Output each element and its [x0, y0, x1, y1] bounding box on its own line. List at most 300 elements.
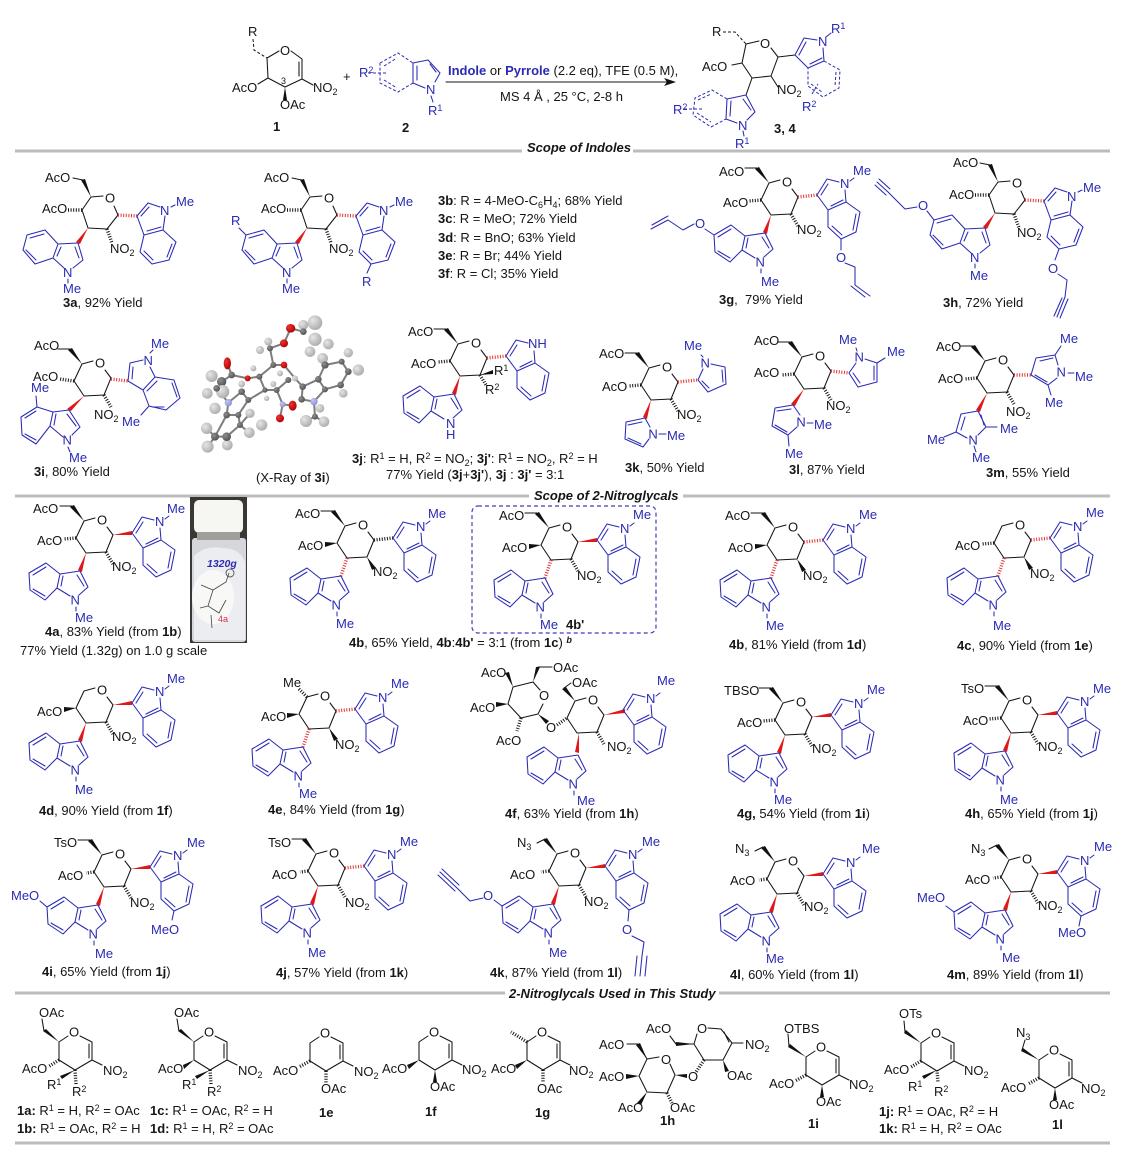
caption 4a: 4a, 83% Yield (from 1b) — [45, 624, 182, 639]
compound 3a: 2 — [130, 248, 135, 258]
compound 4l: Me — [766, 951, 784, 966]
compound 4c: N — [1073, 519, 1082, 534]
compound 1 general 2-nitroglycal: NO — [313, 80, 332, 95]
compound 1g: NO — [569, 1063, 588, 1078]
compound 1g: O — [537, 1024, 547, 1040]
compound 3a: AcO — [45, 170, 70, 185]
compound 3h: N — [970, 250, 979, 265]
compound 4i: Me — [95, 946, 113, 961]
galactose sugar substituent: AcO — [496, 733, 521, 748]
compound 1g: OAc — [537, 1081, 563, 1096]
compound 3m: NO — [1006, 404, 1026, 419]
compound 1 general 2-nitroglycal — [232, 24, 338, 134]
compound 4b': N — [620, 521, 629, 536]
compound 1 general 2-nitroglycal: 2 — [332, 87, 338, 97]
compound 4b': AcO — [502, 540, 527, 555]
product 3, 4 general structure: R — [802, 99, 811, 114]
compound 1a / 1b: NO — [103, 1063, 122, 1078]
compound 2 indole reagent — [359, 53, 442, 135]
compound 3m: Me — [1000, 421, 1018, 436]
reaction scheme — [232, 21, 845, 151]
caption 3m: 3m, 55% Yield — [986, 465, 1070, 480]
compound 3b-3f general: Me — [395, 194, 413, 209]
galactose sugar substituent: AcO — [470, 700, 495, 715]
compound 1 general 2-nitroglycal: AcO — [232, 80, 257, 95]
compound 4i: MeO — [151, 922, 179, 937]
compound 4k: 2 — [604, 901, 609, 911]
legend 1a 1b: 2 — [111, 1121, 116, 1131]
legend 1c 1d: 1 — [182, 1103, 187, 1113]
compound 3m: O — [998, 352, 1008, 368]
caption 3j: ; — [470, 451, 477, 466]
compound 2 indole reagent: R — [428, 103, 437, 118]
compound 4k: Me — [549, 945, 567, 960]
compound 3k: AcO — [602, 379, 627, 394]
caption 3j: = NO — [512, 451, 547, 466]
compound 3k: N — [700, 356, 710, 370]
legend 1j 1k: = OAc — [962, 1121, 1002, 1136]
label 1l: 1l — [1052, 1117, 1063, 1132]
compound 4h: TsO — [961, 681, 984, 696]
compound 4k: O — [622, 922, 632, 937]
compound 3g: N — [840, 176, 849, 191]
compound 4g: O — [796, 694, 806, 710]
compound 3m: Me — [1045, 395, 1063, 410]
compound 3g: O — [782, 174, 792, 190]
compound 4g: NO — [812, 741, 832, 756]
compound 4e — [252, 675, 409, 801]
compound 4a: 2 — [132, 566, 137, 576]
legend 1c 1d: = OAc — [233, 1121, 274, 1136]
compound 3l: Me — [887, 344, 905, 359]
compound 3b-3f general: N — [379, 203, 388, 218]
compound 1j / 1k: AcO — [884, 1062, 909, 1077]
compound 4m — [917, 839, 1112, 965]
compound 3m: Me — [972, 450, 990, 465]
substituent list 3b-3f: ; 68% Yield — [557, 193, 623, 208]
compound 3j / 3j' — [403, 324, 549, 442]
compound 3g: O — [695, 216, 705, 231]
compound 4i: NO — [130, 895, 150, 910]
legend 1j 1k: 1k: R — [879, 1121, 911, 1136]
compound 4e: NO — [335, 737, 354, 752]
label 1e: 1e — [319, 1105, 333, 1120]
compound 4l: NO — [804, 899, 824, 914]
caption 3g: 3g, 79% Yield — [719, 292, 803, 307]
product 3, 4 general structure: 1 — [840, 21, 845, 31]
compound 3l: AcO — [754, 333, 779, 348]
compound 3b-3f general: R — [231, 213, 240, 228]
compound 3b-3f general: R — [362, 274, 371, 289]
compound 4j: O — [329, 846, 339, 860]
label 1i: 1i — [808, 1116, 819, 1131]
compound 4b (from 1c): Me — [428, 506, 446, 521]
section heading: Scope of Indoles: Scope of Indoles — [527, 140, 631, 155]
compound 4e: 2 — [354, 744, 360, 754]
compound 1l: 3 — [1025, 1032, 1030, 1042]
caption 4j: 4j, 57% Yield (from 1k) — [276, 965, 408, 980]
compound 4b (from 1c): Me — [336, 616, 354, 631]
compound 4e: Me — [299, 786, 317, 801]
compound 3k: NO — [677, 407, 696, 422]
compound 4b': 2 — [596, 575, 602, 585]
caption 3j: 3j: R — [352, 451, 379, 466]
section heading: 2-Nitroglycals Used in This Study: 2-Nitroglycals Used in This Study — [508, 986, 716, 1001]
compound 4b': AcO — [499, 508, 524, 523]
galactose sugar substituent: AcO — [481, 665, 506, 680]
compound 4g: TBSO — [724, 683, 759, 698]
compound 1f: NO — [462, 1062, 482, 1077]
compound 4l: AcO — [730, 873, 755, 888]
compound 4l: 2 — [824, 906, 829, 916]
compound 4a: N — [70, 592, 80, 608]
product 3, 4 general structure: NO — [777, 82, 796, 97]
compound 4b': Me — [540, 617, 558, 632]
product 3, 4 general structure: N — [738, 118, 747, 133]
compound 3b-3f general: O — [324, 190, 334, 206]
caption 3h: 3h, 72% Yield — [943, 295, 1023, 310]
compound 1e: OAc — [321, 1081, 347, 1096]
compound 4c — [947, 505, 1104, 633]
compound 1f: O — [429, 1024, 439, 1040]
compound 4b (from 1d): AcO — [725, 508, 750, 523]
compound 4b (from 1d): N — [762, 600, 771, 614]
compound 4f: NO — [607, 739, 626, 754]
compound 4j: N — [302, 926, 312, 940]
compound 1l: OAc — [1049, 1097, 1075, 1112]
legend 1c 1d: 1d: R — [150, 1121, 182, 1136]
compound 4f — [470, 660, 675, 808]
compound 3j / 3j': H — [446, 427, 455, 442]
compound 2 indole reagent: 1 — [437, 103, 442, 113]
compound 3b-3f general: Me — [282, 281, 300, 296]
compound 4e: O — [320, 688, 330, 704]
product 3, 4 general structure: N — [818, 34, 827, 49]
substituent list 3b-3f: 3f: R = Cl; 35% Yield — [438, 266, 558, 281]
caption 4i: 4i, 65% Yield (from 1j) — [42, 964, 171, 979]
panel: scope of 2-nitroglycals — [11, 497, 1112, 982]
compound 4e: N — [294, 768, 303, 784]
compound 3b-3f general: N — [282, 265, 291, 280]
compound 3i — [21, 336, 180, 465]
compound 1 general 2-nitroglycal: 3 — [281, 76, 286, 86]
reaction conditions: MS 4 Å , 25 °C, 2-8 h — [500, 89, 623, 104]
compound 4f: Me — [577, 793, 595, 808]
compound 4b (from 1c): NO — [373, 564, 392, 579]
product 3, 4 general structure: 2 — [796, 89, 802, 99]
compound 1j / 1k: OTs — [899, 1006, 923, 1021]
compound 4g: AcO — [737, 715, 762, 730]
compound 1i: 2 — [868, 1084, 874, 1094]
compound 3i: O — [95, 356, 105, 370]
compound 4j: Me — [400, 834, 418, 849]
compound 4j: 2 — [364, 902, 370, 912]
compound 1l: 2 — [1100, 1088, 1106, 1098]
compound 1i: OAc — [816, 1094, 842, 1109]
compound 4i: AcO — [58, 868, 83, 883]
compound 4d: NO — [112, 729, 132, 744]
caption 4k: 4k, 87% Yield (from 1l) — [490, 965, 622, 980]
compound 3m: N — [1056, 364, 1066, 380]
product 3, 4 general structure: 2 — [811, 99, 816, 109]
compound 3i: NO — [94, 407, 114, 422]
compound 4j: N — [387, 847, 396, 862]
label 1g: 1g — [535, 1105, 550, 1120]
compound 3i: N — [62, 432, 72, 448]
compound 3g: Me — [853, 163, 871, 178]
compound 4k: N — [628, 847, 637, 862]
compound 1 general 2-nitroglycal: R — [248, 24, 257, 39]
legend 1a 1b: = OAc, R — [55, 1121, 111, 1136]
compound 1c / 1d — [158, 1005, 263, 1099]
compound 4c: AcO — [955, 538, 980, 553]
compound 3h: NO — [1017, 225, 1036, 240]
compound 4k: AcO — [510, 867, 535, 882]
legend 1c 1d: = OAc, R — [187, 1103, 244, 1118]
compound 3m: 2 — [1026, 411, 1031, 421]
compound 4j: AcO — [272, 867, 297, 882]
compound 2 indole reagent: 2 — [368, 65, 373, 75]
compound 2 indole reagent: 2 — [402, 120, 409, 135]
caption 3j: 2 — [547, 458, 552, 468]
legend 1c 1d: 2 — [228, 1121, 233, 1131]
substituent list 3b-3f: 3e: R = Br; 44% Yield — [438, 248, 562, 263]
compound 3l: Me — [814, 417, 832, 432]
compound 1f: OAc — [430, 1079, 456, 1094]
caption 3j: 2 — [568, 451, 573, 461]
legend 1j 1k: = H — [974, 1104, 998, 1119]
compound 3h — [875, 155, 1101, 318]
compound 4c: N — [988, 598, 998, 612]
photo of 4a vial — [190, 497, 247, 643]
compound 1h — [599, 1021, 770, 1115]
compound 2 indole reagent: N — [426, 82, 435, 97]
label 1h: 1h — [660, 1113, 675, 1128]
compound 4l: N — [735, 841, 744, 856]
compound 3a: Me — [176, 194, 194, 209]
compound 4k — [438, 834, 660, 976]
compound 4d: AcO — [37, 704, 62, 719]
caption 3j: 1 — [507, 451, 512, 461]
compound 3h: AcO — [949, 187, 974, 202]
compound 4b (from 1c) — [290, 506, 446, 631]
compound 3j / 3j': R — [485, 382, 494, 397]
compound 3k: Me — [667, 428, 685, 443]
reaction conditions: Indole or Pyrrole (2.2 eq), TFE (0.5 M), — [448, 63, 678, 78]
compound 4l — [720, 841, 880, 966]
compound 4k: O — [483, 888, 493, 903]
caption 4g: 4g, 54% Yield (from 1i) — [737, 806, 870, 821]
compound 3a: N — [160, 203, 169, 218]
compound 3k: 2 — [696, 414, 702, 424]
compound 1j / 1k: R — [908, 1079, 917, 1094]
legend 1a 1b: 1 — [50, 1121, 55, 1131]
compound 3j / 3j': O — [471, 336, 481, 350]
compound 1c / 1d: NO — [238, 1063, 258, 1078]
compound 3g: AcO — [719, 164, 744, 179]
caption X-ray: (X-Ray of 3i) — [256, 470, 330, 485]
compound 3j / 3j': 1 — [503, 363, 508, 373]
compound 4b (from 1d): Me — [859, 507, 877, 522]
compound 4l: 3 — [744, 848, 749, 858]
substituent list 3b-3f — [438, 193, 623, 281]
compound 3m: N — [968, 432, 978, 448]
legend 1c 1d — [150, 1103, 274, 1136]
compound 4k: Me — [642, 834, 660, 849]
compound 4i: TsO — [54, 835, 77, 850]
legend 1c 1d: 1 — [182, 1121, 188, 1131]
compound 3b-3f general: NO — [329, 241, 348, 256]
compound 3j / 3j': R — [494, 363, 503, 378]
caption 4a: 77% Yield (1.32g) on 1.0 g scale — [20, 643, 207, 658]
compound 4g — [724, 682, 885, 807]
compound 4b (from 1d): N — [846, 521, 855, 536]
substituent list 3b-3f: 6 — [538, 200, 543, 210]
compound 4d: N — [70, 762, 80, 778]
compound 4a: Me — [75, 610, 93, 625]
compound 4b (from 1c): N — [332, 598, 341, 612]
galactose sugar substituent: OAc — [553, 660, 579, 675]
compound 3g: Me — [761, 274, 779, 289]
compound 3g: N — [756, 254, 765, 270]
compound 3g: 2 — [816, 229, 822, 239]
legend 1a 1b: = OAc — [100, 1103, 140, 1118]
compound 3a: O — [105, 190, 115, 206]
legend 1c 1d: 1c: R — [150, 1103, 182, 1118]
compound 4h: N — [1080, 694, 1089, 709]
compound 4m: O — [1022, 852, 1032, 866]
product 3, 4 general structure: R — [831, 21, 840, 36]
compound 1h: O — [697, 1021, 707, 1036]
compound 3j / 3j': 2 — [494, 382, 499, 392]
photo of 4a vial: 4a — [218, 614, 228, 624]
compound 4m: Me — [1094, 839, 1112, 854]
compound 3a: AcO — [42, 201, 67, 216]
compound 3l: N — [796, 414, 806, 430]
compound 4h: Me — [1000, 792, 1018, 807]
caption 4c: 4c, 90% Yield (from 1e) — [957, 638, 1093, 653]
compound 4i: 2 — [150, 902, 155, 912]
compound 4b (from 1d): Me — [766, 618, 784, 633]
compound 1j / 1k — [884, 1006, 989, 1099]
compound 4l: N — [762, 934, 771, 948]
compound 3h: AcO — [953, 155, 978, 170]
compound 4e: N — [378, 690, 387, 705]
compound 3g: O — [836, 250, 846, 265]
caption 4l: 4l, 60% Yield (from 1l) — [730, 967, 859, 982]
compound 1h: OAc — [727, 1068, 753, 1083]
compound 4a: NO — [112, 559, 132, 574]
compound 4a — [29, 501, 185, 625]
compound 1i — [769, 1021, 874, 1109]
reaction arrow — [446, 78, 676, 86]
compound 1i: O — [816, 1040, 826, 1054]
compound 3m: AcO — [938, 371, 963, 386]
compound 4b (from 1c): 2 — [392, 571, 398, 581]
compound 3h: O — [1012, 176, 1022, 190]
compound 4m: N — [996, 932, 1005, 946]
compound 3a: NO — [110, 241, 130, 256]
label 1f: 1f — [425, 1104, 437, 1119]
compound 1j / 1k: O — [931, 1026, 941, 1040]
compound 4h: AcO — [963, 713, 988, 728]
compound 3j / 3j': AcO — [408, 324, 433, 339]
compound 4i: O — [115, 846, 125, 862]
product 3, 4 general structure: 1 — [744, 136, 749, 146]
caption 4e: 4e, 84% Yield (from 1g) — [268, 802, 405, 817]
compound 1i: NO — [849, 1077, 868, 1092]
compound 4m: N — [1080, 853, 1089, 868]
compound 4d: Me — [167, 671, 185, 686]
compound 1h: O — [661, 1052, 671, 1067]
legend 1a 1b — [17, 1103, 140, 1136]
caption 3k: 3k, 50% Yield — [625, 460, 705, 475]
galactose sugar substituent: O — [546, 720, 556, 735]
compound 4e: AcO — [261, 709, 286, 724]
compound 1i: OTBS — [784, 1021, 820, 1036]
compound 3i: AcO — [34, 338, 59, 353]
compound 3k: O — [662, 360, 672, 374]
caption 3j: 2 — [465, 458, 470, 468]
compound 1j / 1k: 1 — [917, 1079, 922, 1089]
compound 4b': NO — [577, 568, 596, 583]
legend 1j 1k — [879, 1104, 1002, 1136]
compound 4g: 2 — [832, 748, 837, 758]
legend 1a 1b: 2 — [95, 1103, 100, 1113]
compound 1c / 1d: 1 — [191, 1077, 196, 1087]
compound 3j / 3j': NH — [528, 336, 547, 351]
compound 4b (from 1c): AcO — [295, 506, 320, 521]
substituent list 3b-3f: 4 — [552, 200, 557, 210]
product 3, 4 general structure: 3, 4 — [774, 121, 796, 136]
compound 4i — [11, 835, 205, 961]
dashed highlight box: 4b': 4b' — [566, 617, 584, 632]
panel: scope of indoles — [21, 155, 1101, 485]
compound 3h: N — [1067, 189, 1076, 204]
reaction conditions — [448, 63, 678, 104]
compound 1l: N — [1016, 1025, 1025, 1040]
compound 1c / 1d: OAc — [174, 1005, 200, 1020]
compound 4k: N — [544, 926, 553, 940]
compound 1e: AcO — [273, 1063, 298, 1078]
compound 1l: AcO — [1001, 1080, 1026, 1095]
compound 3h: Me — [970, 268, 988, 283]
substituent list 3b-3f: 3c: R = MeO; 72% Yield — [438, 211, 577, 226]
compound 1c / 1d: R — [207, 1084, 216, 1099]
compound 1c / 1d: O — [204, 1024, 214, 1040]
compound 4m: MeO — [1058, 925, 1086, 940]
compound 4m: N — [971, 841, 980, 856]
legend 1a 1b: = H, R — [54, 1103, 95, 1118]
galactose sugar substituent: O — [539, 688, 549, 703]
compound 3l — [754, 332, 905, 461]
compound 4b' — [494, 507, 651, 632]
compound 1a / 1b — [22, 1005, 128, 1099]
compound 3g: AcO — [723, 195, 748, 210]
compound 3i: Me — [31, 380, 49, 395]
product 3, 4 general structure: AcO — [702, 59, 727, 74]
compound 4j: TsO — [268, 835, 291, 850]
compound 4a: Me — [167, 501, 185, 516]
compound 4j — [261, 834, 418, 960]
compound 3m — [927, 331, 1093, 465]
caption 4b: 4b, 65% Yield, 4b:4b' = 3:1 (from 1c) — [349, 635, 563, 650]
compound 3b-3f general — [231, 170, 413, 296]
compound 4i: MeO — [11, 888, 39, 903]
compound 1 general 2-nitroglycal: O — [280, 43, 290, 58]
caption 3j: , R — [552, 451, 568, 466]
compound 3b-3f general: 2 — [348, 248, 354, 258]
